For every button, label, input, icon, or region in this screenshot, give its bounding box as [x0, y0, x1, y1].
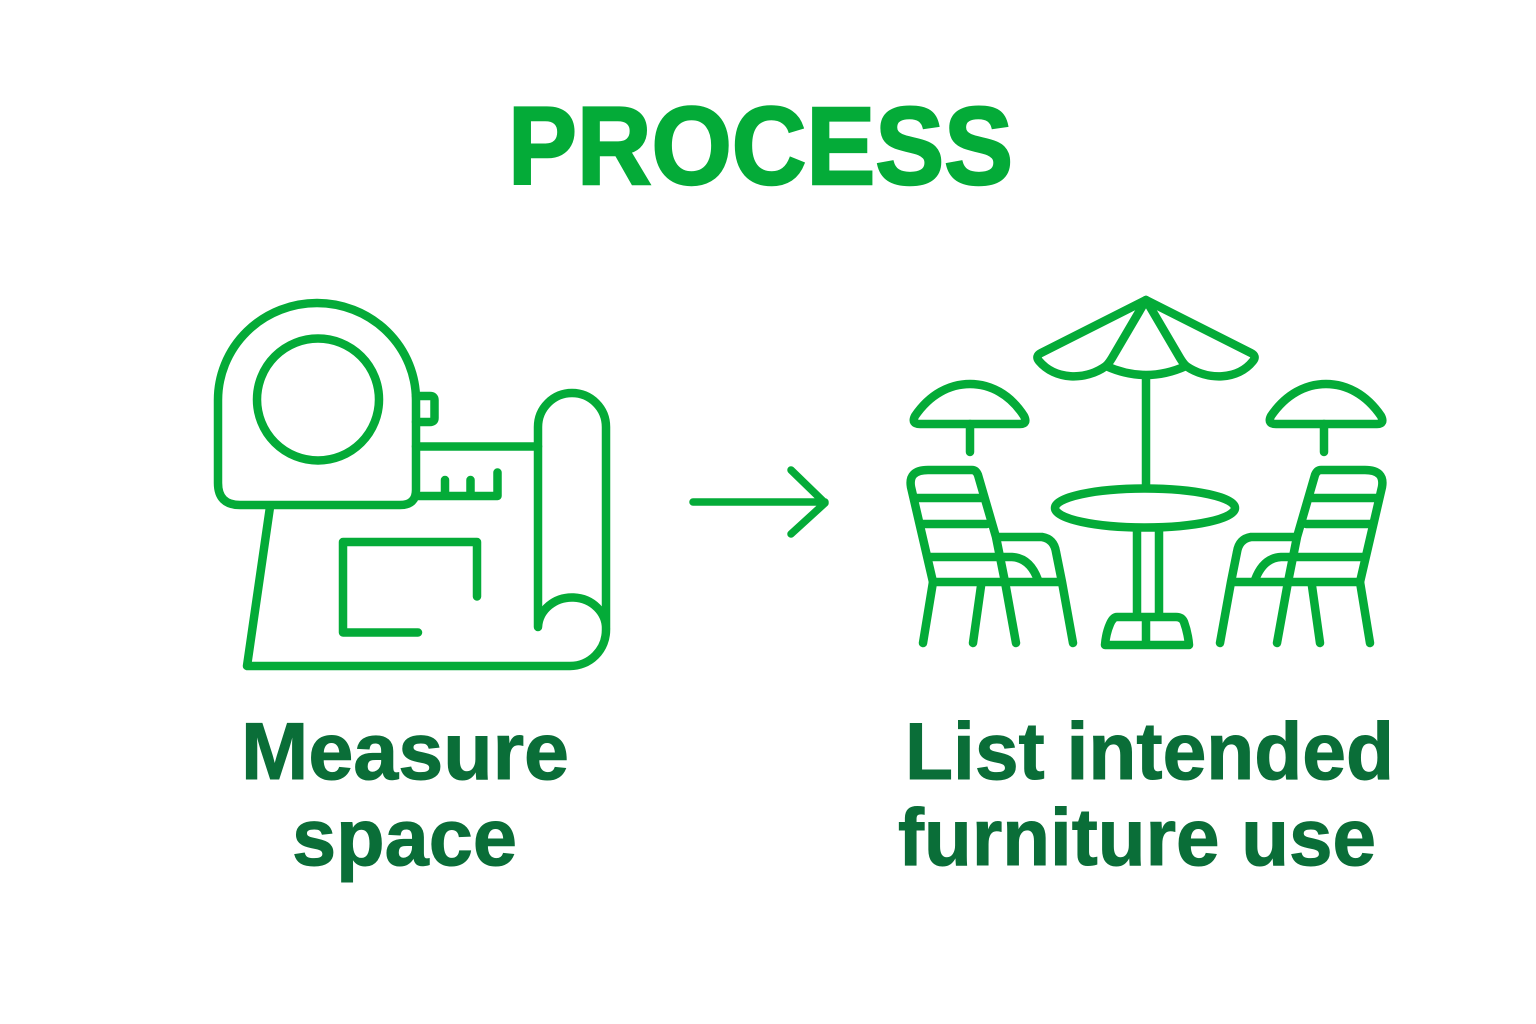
- tape measure body: [218, 303, 416, 505]
- label: measure space: Measure: [241, 707, 569, 797]
- left chair: [911, 470, 1073, 643]
- table: [1055, 488, 1235, 645]
- arrow: [693, 470, 825, 534]
- label: measure space: [241, 707, 569, 883]
- label: list intended furniture use: List intended: [905, 707, 1394, 797]
- title: PROCESS: [508, 85, 1013, 208]
- tape blade with ticks: [416, 446, 538, 496]
- label: list intended furniture use: [898, 707, 1394, 883]
- tape measure reel: [257, 338, 379, 460]
- floor plan outline: [343, 542, 477, 632]
- icon: tape measure on floor plan: [218, 303, 606, 666]
- tape measure tab: [416, 396, 434, 422]
- icon: patio table, umbrella and chairs: [911, 300, 1382, 645]
- label: measure space: space: [292, 793, 517, 883]
- large umbrella: [1037, 300, 1255, 486]
- small right umbrella: [1270, 384, 1382, 452]
- small left umbrella: [914, 384, 1025, 452]
- blueprint sheet and roll: [247, 393, 606, 666]
- label: list intended furniture use: furniture use: [898, 793, 1376, 883]
- right chair: [1220, 470, 1382, 643]
